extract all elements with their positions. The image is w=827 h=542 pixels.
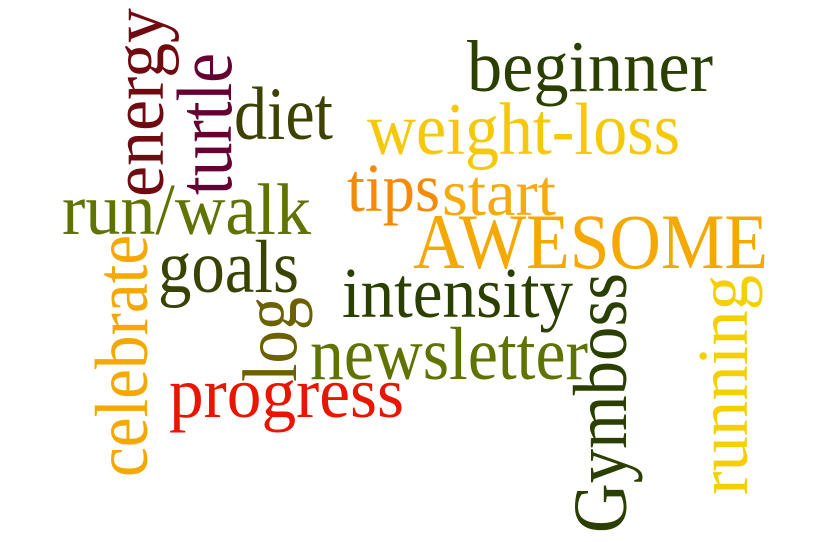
- word: newsletter: newsletter: [310, 313, 588, 396]
- word: tips: tips: [347, 150, 440, 226]
- word: celebrate: celebrate: [81, 235, 164, 477]
- word: weight-loss: weight-loss: [367, 89, 680, 171]
- word: diet: diet: [234, 73, 333, 156]
- word: start: start: [442, 157, 556, 230]
- word: beginner: beginner: [467, 26, 713, 107]
- word: running: running: [683, 275, 763, 495]
- word: turtle: turtle: [161, 53, 248, 195]
- word: run/walk: run/walk: [62, 169, 311, 250]
- word: AWESOME: AWESOME: [413, 198, 768, 285]
- word: intensity: intensity: [342, 253, 573, 333]
- word: goals: goals: [158, 226, 299, 309]
- word: Gymboss: Gymboss: [559, 273, 643, 533]
- word: progress: progress: [169, 353, 404, 433]
- word: energy: energy: [98, 8, 180, 197]
- word: log: log: [227, 297, 313, 382]
